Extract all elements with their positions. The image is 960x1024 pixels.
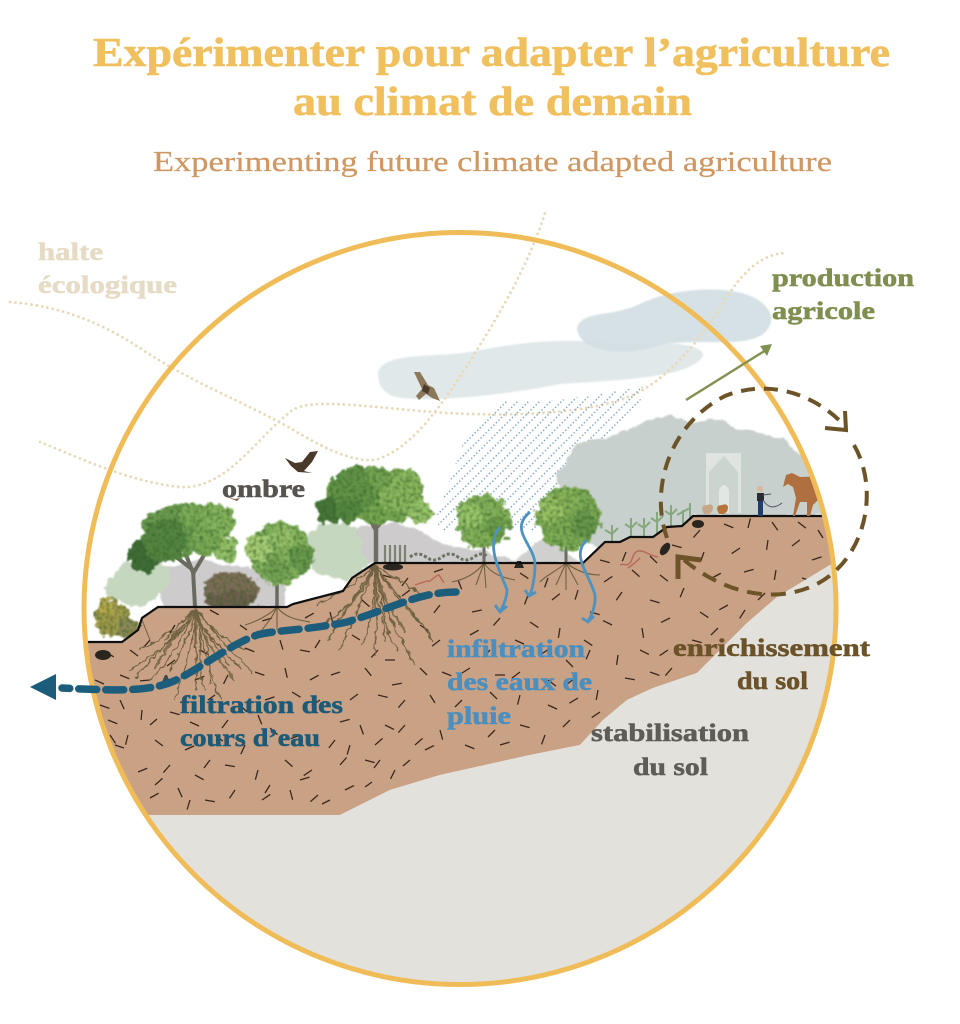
rain hatching (437, 386, 643, 530)
label: infiltration (447, 636, 592, 730)
dotted route: halte écologique (10, 213, 545, 460)
label: enrichissement: du sol (737, 668, 808, 695)
label: filtration: cours d’eau (180, 725, 320, 752)
soil flecks (95, 516, 824, 810)
soil (70, 516, 850, 815)
tree: middle (245, 522, 313, 607)
title: au climat de demain (293, 78, 692, 124)
hawk: lower (285, 451, 318, 473)
label: infiltration: infiltration (447, 636, 585, 663)
label: ombre: ombre (222, 476, 305, 503)
mountain silhouette (557, 413, 826, 545)
walker (757, 486, 782, 516)
infiltration arrows (494, 512, 595, 622)
label: production agricole (772, 265, 914, 325)
cloud: left (378, 341, 703, 399)
shrub: brown (202, 572, 258, 609)
soil enrichment cycle arrows (661, 389, 867, 595)
cloud: right (577, 289, 771, 352)
small bird (228, 498, 240, 501)
label: infiltration: pluie (447, 703, 511, 730)
label: enrichissement: enrichissement (673, 635, 871, 662)
hens (702, 504, 728, 514)
filtration arrow (30, 592, 456, 700)
grey background silhouettes (150, 522, 580, 607)
hawk: upper (414, 372, 440, 401)
dotted route: production agricole (40, 253, 787, 487)
label: halte écologique: halte (38, 239, 103, 266)
label: halte écologique: écologique (38, 272, 177, 299)
title (93, 29, 890, 124)
label: filtration (180, 692, 343, 752)
soil animals (95, 520, 704, 682)
horse (783, 473, 818, 516)
label: filtration: filtration des (180, 692, 343, 719)
label: stabilisation (591, 720, 749, 781)
tree: small infiltration left (456, 494, 510, 563)
chapel (706, 453, 741, 513)
production arrow (686, 344, 772, 400)
tree: small infiltration right (536, 485, 600, 563)
bedrock (148, 564, 834, 982)
label: production agricole: production (772, 265, 914, 292)
circular scene (60, 372, 860, 1000)
roots: middle and small trees (130, 563, 600, 640)
pale background trees (105, 522, 367, 607)
label: stabilisation: du sol (633, 754, 708, 781)
seedlings row (605, 503, 690, 545)
tree: large right (316, 465, 432, 563)
label: halte écologique (38, 239, 177, 299)
subtitle: Experimenting future climate adapted agriculture (153, 146, 832, 178)
ground line (87, 516, 826, 642)
label: stabilisation: stabilisation (591, 720, 749, 747)
roots: right tree (318, 565, 432, 665)
label: production agricole: agricole (772, 298, 875, 325)
label: infiltration: des eaux de (447, 669, 592, 696)
title: Expérimenter pour adapter l’agriculture (93, 29, 890, 75)
roots: left tree (130, 608, 252, 700)
low crops (385, 545, 405, 563)
label: enrichissement (673, 635, 871, 695)
frame circle (84, 232, 836, 984)
shrub: yellow (94, 598, 138, 638)
tree: large left (128, 502, 238, 607)
earthworms (415, 551, 658, 585)
